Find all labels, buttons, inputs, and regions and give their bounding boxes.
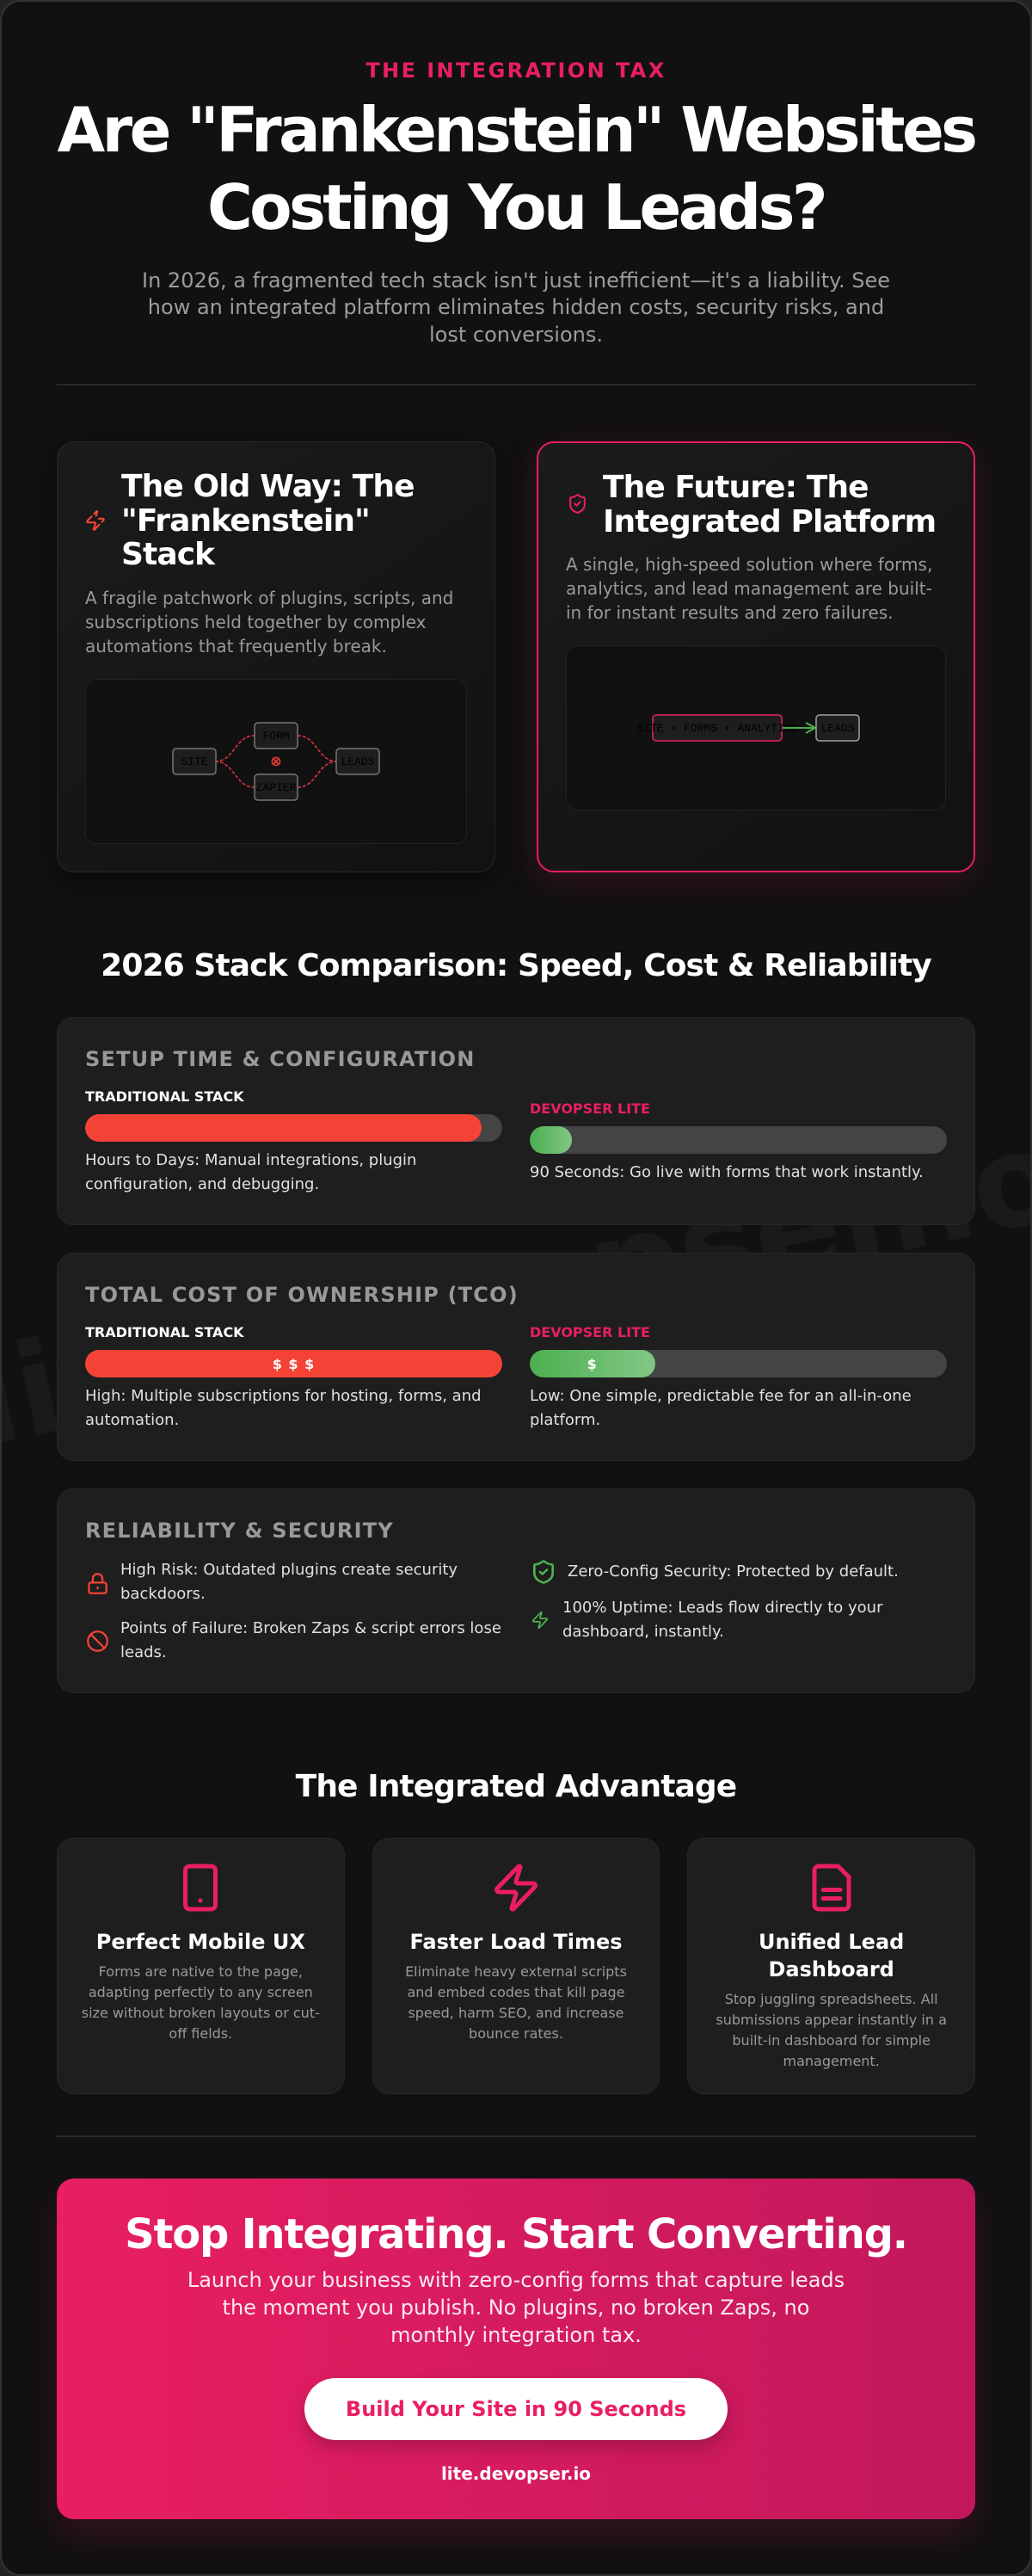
tco traditional bar [85, 1350, 502, 1377]
high risk text: High Risk: Outdated plugins create security [120, 1561, 458, 1579]
tco devopser bar: $ [587, 1356, 598, 1371]
cta text: monthly integration tax. [390, 2323, 642, 2347]
old way description: subscriptions held together by complex [85, 612, 426, 632]
tco devopser text: Low: One simple, predictable fee for an all-in-one [530, 1387, 912, 1405]
panel: the future [537, 441, 975, 872]
cta heading: Stop Integrating. Start Converting. [125, 2210, 907, 2259]
panel: perfect mobile ux [57, 1838, 345, 2094]
setup devopser text: 90 Seconds: Go live with forms that work instantly. [530, 1163, 924, 1181]
setup devopser bar [530, 1126, 947, 1154]
icon: lock [88, 1573, 108, 1594]
old way description [85, 588, 453, 656]
tco traditional text [85, 1387, 482, 1429]
icon: broken zap [86, 510, 105, 531]
speed description [405, 1963, 627, 2042]
tco traditional text: automation. [85, 1411, 179, 1429]
speed description: Eliminate heavy external scripts [405, 1963, 627, 1980]
icon: green shield [533, 1560, 554, 1584]
section heading: integrated advantage: The Integrated Advantage [296, 1769, 736, 1804]
icon: ban [87, 1630, 108, 1652]
subtitle: In 2026, a fragmented tech stack isn't just inefficient—it's a liability. See [142, 268, 890, 293]
points of failure text [120, 1619, 501, 1661]
future heading: The Future: The [603, 470, 869, 505]
mobile description: off fields. [169, 2025, 232, 2042]
high risk text: backdoors. [120, 1585, 206, 1603]
panel: setup time [57, 1017, 975, 1225]
subtitle: how an integrated platform eliminates hidden costs, security risks, and [148, 295, 884, 319]
dashboard heading [759, 1930, 904, 1981]
tco devopser text [530, 1387, 912, 1429]
title: Are "Frankenstein" Websites [58, 94, 974, 166]
uptime text: 100% Uptime: Leads flow directly to your [562, 1599, 882, 1617]
setup traditional label: TRADITIONAL STACK [85, 1088, 244, 1105]
tco devopser label: DEVOPSER LITE [530, 1324, 650, 1340]
old way heading: "Frankenstein" [121, 503, 370, 539]
cta button: Build Your Site in 90 Seconds [346, 2397, 686, 2421]
cta text: Launch your business with zero-config forms that capture leads [187, 2268, 845, 2292]
tco devopser text: platform. [530, 1411, 600, 1429]
dashboard description: Stop juggling spreadsheets. All [725, 1991, 938, 2007]
setup traditional text: Hours to Days: Manual integrations, plugin [85, 1151, 416, 1169]
speed description: and embed codes that kill page [407, 1984, 625, 2000]
title [57, 94, 975, 243]
old way description: A fragile patchwork of plugins, scripts, and [85, 588, 453, 608]
old way heading: Stack [121, 537, 214, 572]
setup traditional text: configuration, and debugging. [85, 1175, 319, 1193]
tco devopser bar [530, 1350, 947, 1377]
points of failure text: Points of Failure: Broken Zaps & script errors lose [120, 1619, 501, 1637]
title: Costing You Leads? [207, 171, 825, 243]
panel: call to action [57, 2179, 975, 2519]
uptime text: dashboard, instantly. [562, 1623, 724, 1641]
diagram: integrated platform: SITE + FORMS + ANALYTICS [636, 722, 798, 735]
cta text [187, 2268, 845, 2347]
panel: unified lead dashboard [687, 1838, 975, 2094]
uptime text [562, 1599, 883, 1641]
points of failure text: leads. [120, 1643, 167, 1661]
icon: shield check [569, 494, 586, 514]
future description: analytics, and lead management are built- [566, 578, 932, 599]
subtitle [142, 268, 890, 347]
dashboard description: built-in dashboard for simple [732, 2032, 931, 2049]
cta text: the moment you publish. No plugins, no broken Zaps, no [223, 2296, 809, 2320]
diagram: frankenstein stack: SITE [181, 755, 208, 768]
old way heading: The Old Way: The [121, 469, 415, 504]
dashboard description [716, 1991, 947, 2069]
icon: document [812, 1864, 851, 1912]
setup devopser label: DEVOPSER LITE [530, 1100, 650, 1117]
old way description: automations that frequently break. [85, 636, 387, 656]
dashboard description: management. [783, 2053, 880, 2069]
dashboard heading: Unified Lead [759, 1930, 904, 1954]
diagram: frankenstein stack: LEADS [341, 755, 375, 768]
setup traditional text [85, 1151, 416, 1193]
website url: lite.devopser.io [441, 2463, 591, 2484]
mobile heading: Perfect Mobile UX [96, 1930, 305, 1954]
future heading: Integrated Platform [603, 504, 936, 539]
reliability heading: RELIABILITY & SECURITY [85, 1519, 394, 1543]
high risk text [120, 1561, 458, 1603]
future heading [603, 470, 936, 539]
panel: total cost of ownership [57, 1253, 975, 1461]
future description [566, 554, 932, 623]
zero config text: Zero-Config Security: Protected by default. [568, 1562, 899, 1581]
panel: faster load times [372, 1838, 660, 2094]
icon: smartphone [183, 1864, 218, 1912]
future description: in for instant results and zero failures. [566, 602, 894, 623]
old way heading [121, 469, 415, 572]
setup heading: SETUP TIME & CONFIGURATION [85, 1047, 475, 1071]
setup traditional bar [85, 1114, 502, 1142]
tco traditional bar: $ $ $ [273, 1356, 315, 1371]
icon: zap [494, 1864, 538, 1912]
subtitle: lost conversions. [429, 323, 603, 347]
cta button [304, 2378, 728, 2440]
tco heading: TOTAL COST OF OWNERSHIP (TCO) [85, 1283, 519, 1307]
diagram: integrated platform [566, 645, 946, 810]
icon: green zap [531, 1611, 549, 1630]
speed description: speed, harm SEO, and increase [408, 2005, 624, 2021]
section heading: stack comparison: 2026 Stack Comparison: Speed, Cost & Reliability [101, 948, 931, 983]
mobile description: adapting perfectly to any screen [89, 1984, 313, 2000]
speed description: bounce rates. [469, 2025, 563, 2042]
diagram: frankenstein stack [85, 679, 467, 844]
mobile description [82, 1963, 320, 2042]
mobile description: size without broken layouts or cut- [82, 2005, 320, 2021]
eyebrow: THE INTEGRATION TAX [366, 59, 666, 83]
diagram: frankenstein stack: FORM [262, 730, 290, 743]
speed heading: Faster Load Times [409, 1930, 623, 1954]
dashboard description: submissions appear instantly in a [716, 2012, 947, 2028]
mobile description: Forms are native to the page, [99, 1963, 303, 1980]
tco traditional text: High: Multiple subscriptions for hosting, forms, and [85, 1387, 482, 1405]
dashboard heading: Dashboard [768, 1957, 894, 1981]
panel: the old way [57, 441, 495, 872]
future description: A single, high-speed solution where forms, [566, 554, 932, 575]
diagram: integrated platform: LEADS [820, 722, 855, 735]
diagram: frankenstein stack: ZAPIER [256, 781, 297, 794]
tco traditional label: TRADITIONAL STACK [85, 1324, 244, 1340]
panel: reliability and security [57, 1488, 975, 1693]
